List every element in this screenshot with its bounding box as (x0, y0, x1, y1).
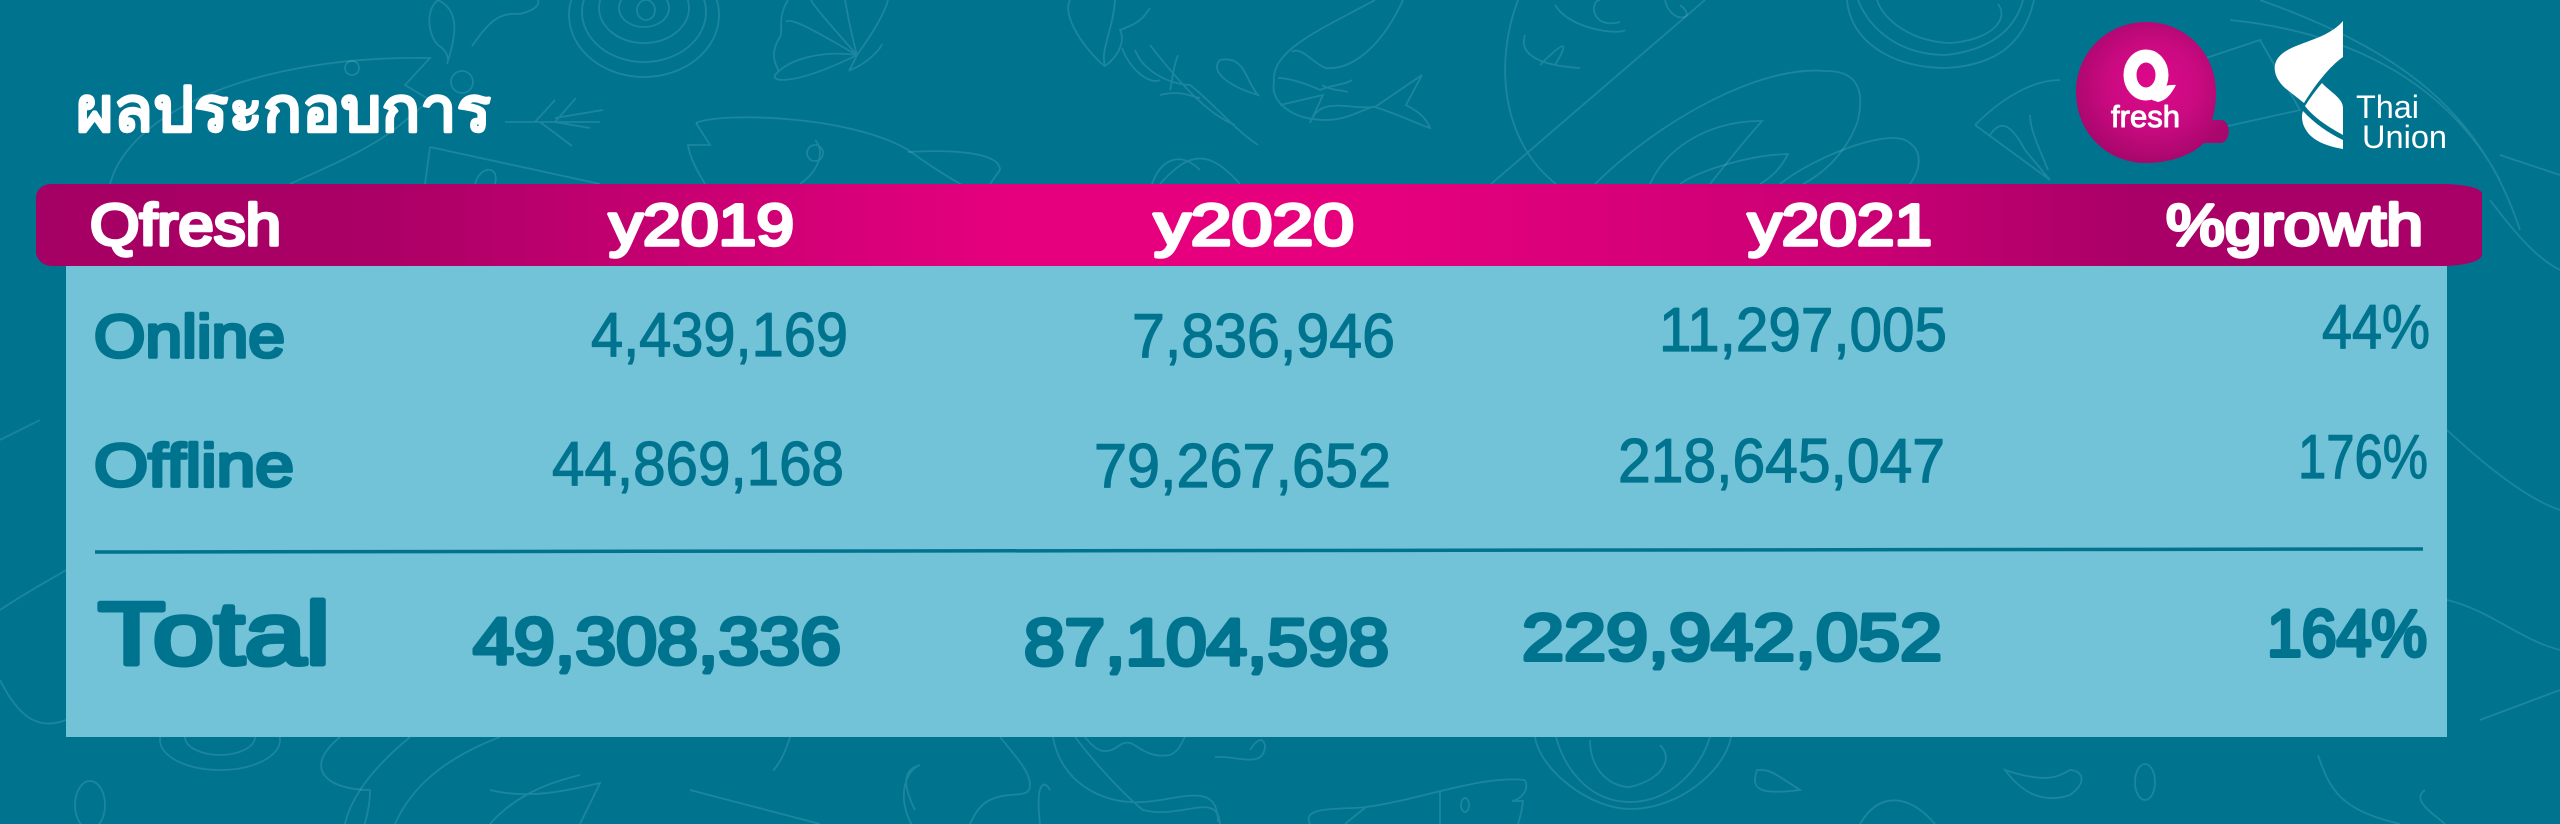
header: y2020: y2020 (1154, 193, 1354, 258)
header: %growth: %growth (2166, 193, 2423, 258)
logo: Thai Union: Union (2362, 119, 2447, 155)
row: Offline (94, 423, 2428, 501)
row: Offline: 218,645,047 (1618, 427, 1945, 496)
table panel (36, 184, 2482, 737)
row: Online: 4,439,169 (591, 301, 848, 370)
header: y2021: y2021 (1748, 193, 1932, 258)
row: Total: 87,104,598 (1024, 605, 1389, 679)
header band (36, 184, 2482, 266)
row: Offline: 44,869,168 (552, 430, 844, 499)
row: Total: 164% (2267, 596, 2427, 670)
row: Online: Online (94, 303, 285, 370)
row: Offline: 79,267,652 (1094, 432, 1391, 501)
row: Offline: Offline (94, 432, 294, 499)
row: Total: Total (98, 584, 330, 683)
logo: Qfresh: fresh (2111, 99, 2180, 134)
logo: Qfresh (2076, 22, 2229, 163)
row: Total: 229,942,052 (1522, 600, 1942, 674)
row: Online: 7,836,946 (1132, 302, 1395, 371)
row: Total: 49,308,336 (473, 604, 841, 678)
header: Qfresh: Qfresh (90, 193, 281, 258)
row: Offline: 176% (2298, 423, 2428, 492)
header: y2019: y2019 (609, 193, 794, 258)
row: Online: 11,297,005 (1659, 296, 1947, 365)
title: ผลประกอบการ (76, 76, 491, 145)
logo: Thai Union: Thai (2356, 89, 2419, 125)
row: Total (98, 584, 2427, 683)
row: Online: 44% (2322, 293, 2430, 362)
logo: Thai Union (2275, 21, 2447, 155)
row: Online (94, 293, 2430, 371)
